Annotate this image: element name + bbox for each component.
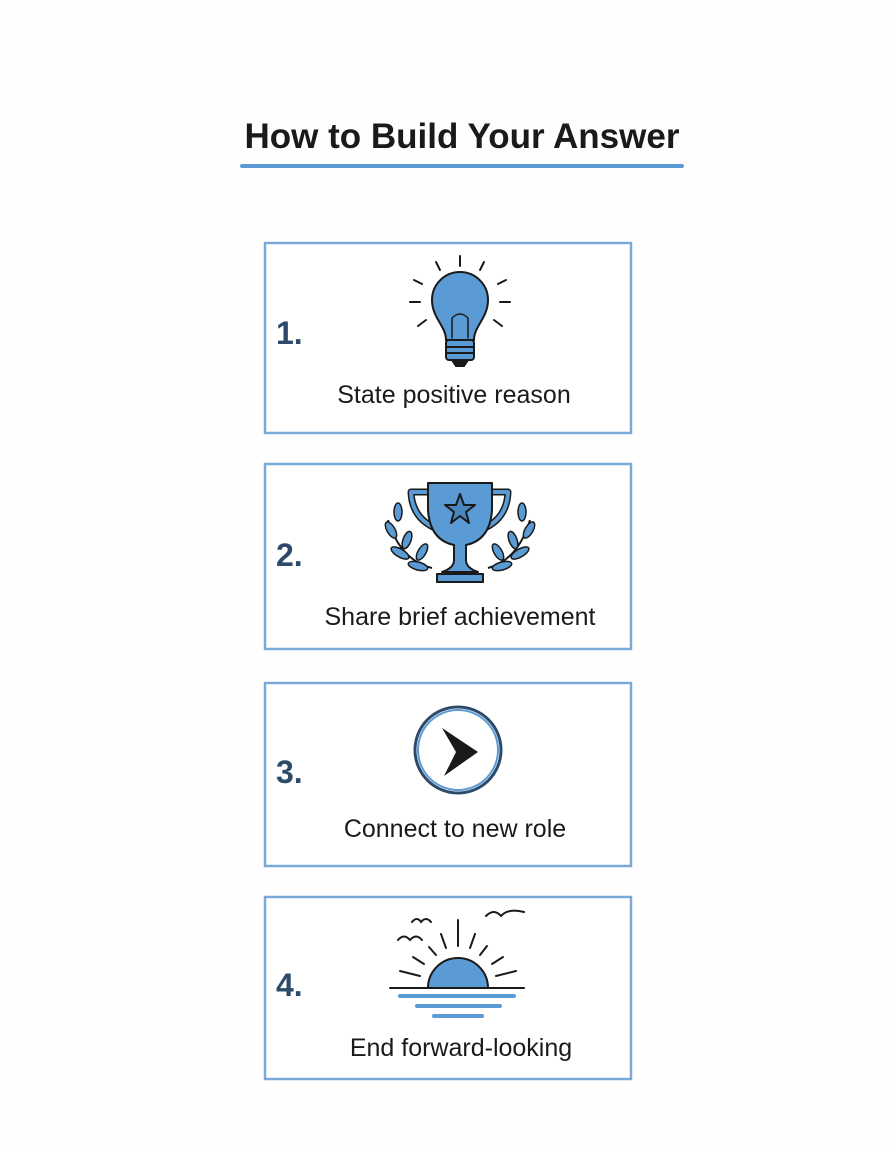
icon: light bulb <box>410 256 510 366</box>
label 3: Connect to new role <box>344 815 566 843</box>
label 4: End forward-looking <box>350 1034 572 1062</box>
icon: arrow circle <box>415 707 501 793</box>
number 4: 4. <box>276 967 303 1003</box>
number 3: 3. <box>276 754 303 790</box>
number 1: 1. <box>276 315 303 351</box>
icon: trophy <box>383 483 537 582</box>
title: How to Build Your Answer <box>245 117 680 156</box>
label 2: Share brief achievement <box>325 603 596 631</box>
panel: step 3 <box>265 683 631 866</box>
panel: step 1 <box>265 243 631 433</box>
panel: step 4 <box>265 897 631 1079</box>
panel: step 2 <box>265 464 631 649</box>
icon: sunset <box>390 911 524 1016</box>
number 2: 2. <box>276 537 303 573</box>
label 1: State positive reason <box>337 381 571 409</box>
